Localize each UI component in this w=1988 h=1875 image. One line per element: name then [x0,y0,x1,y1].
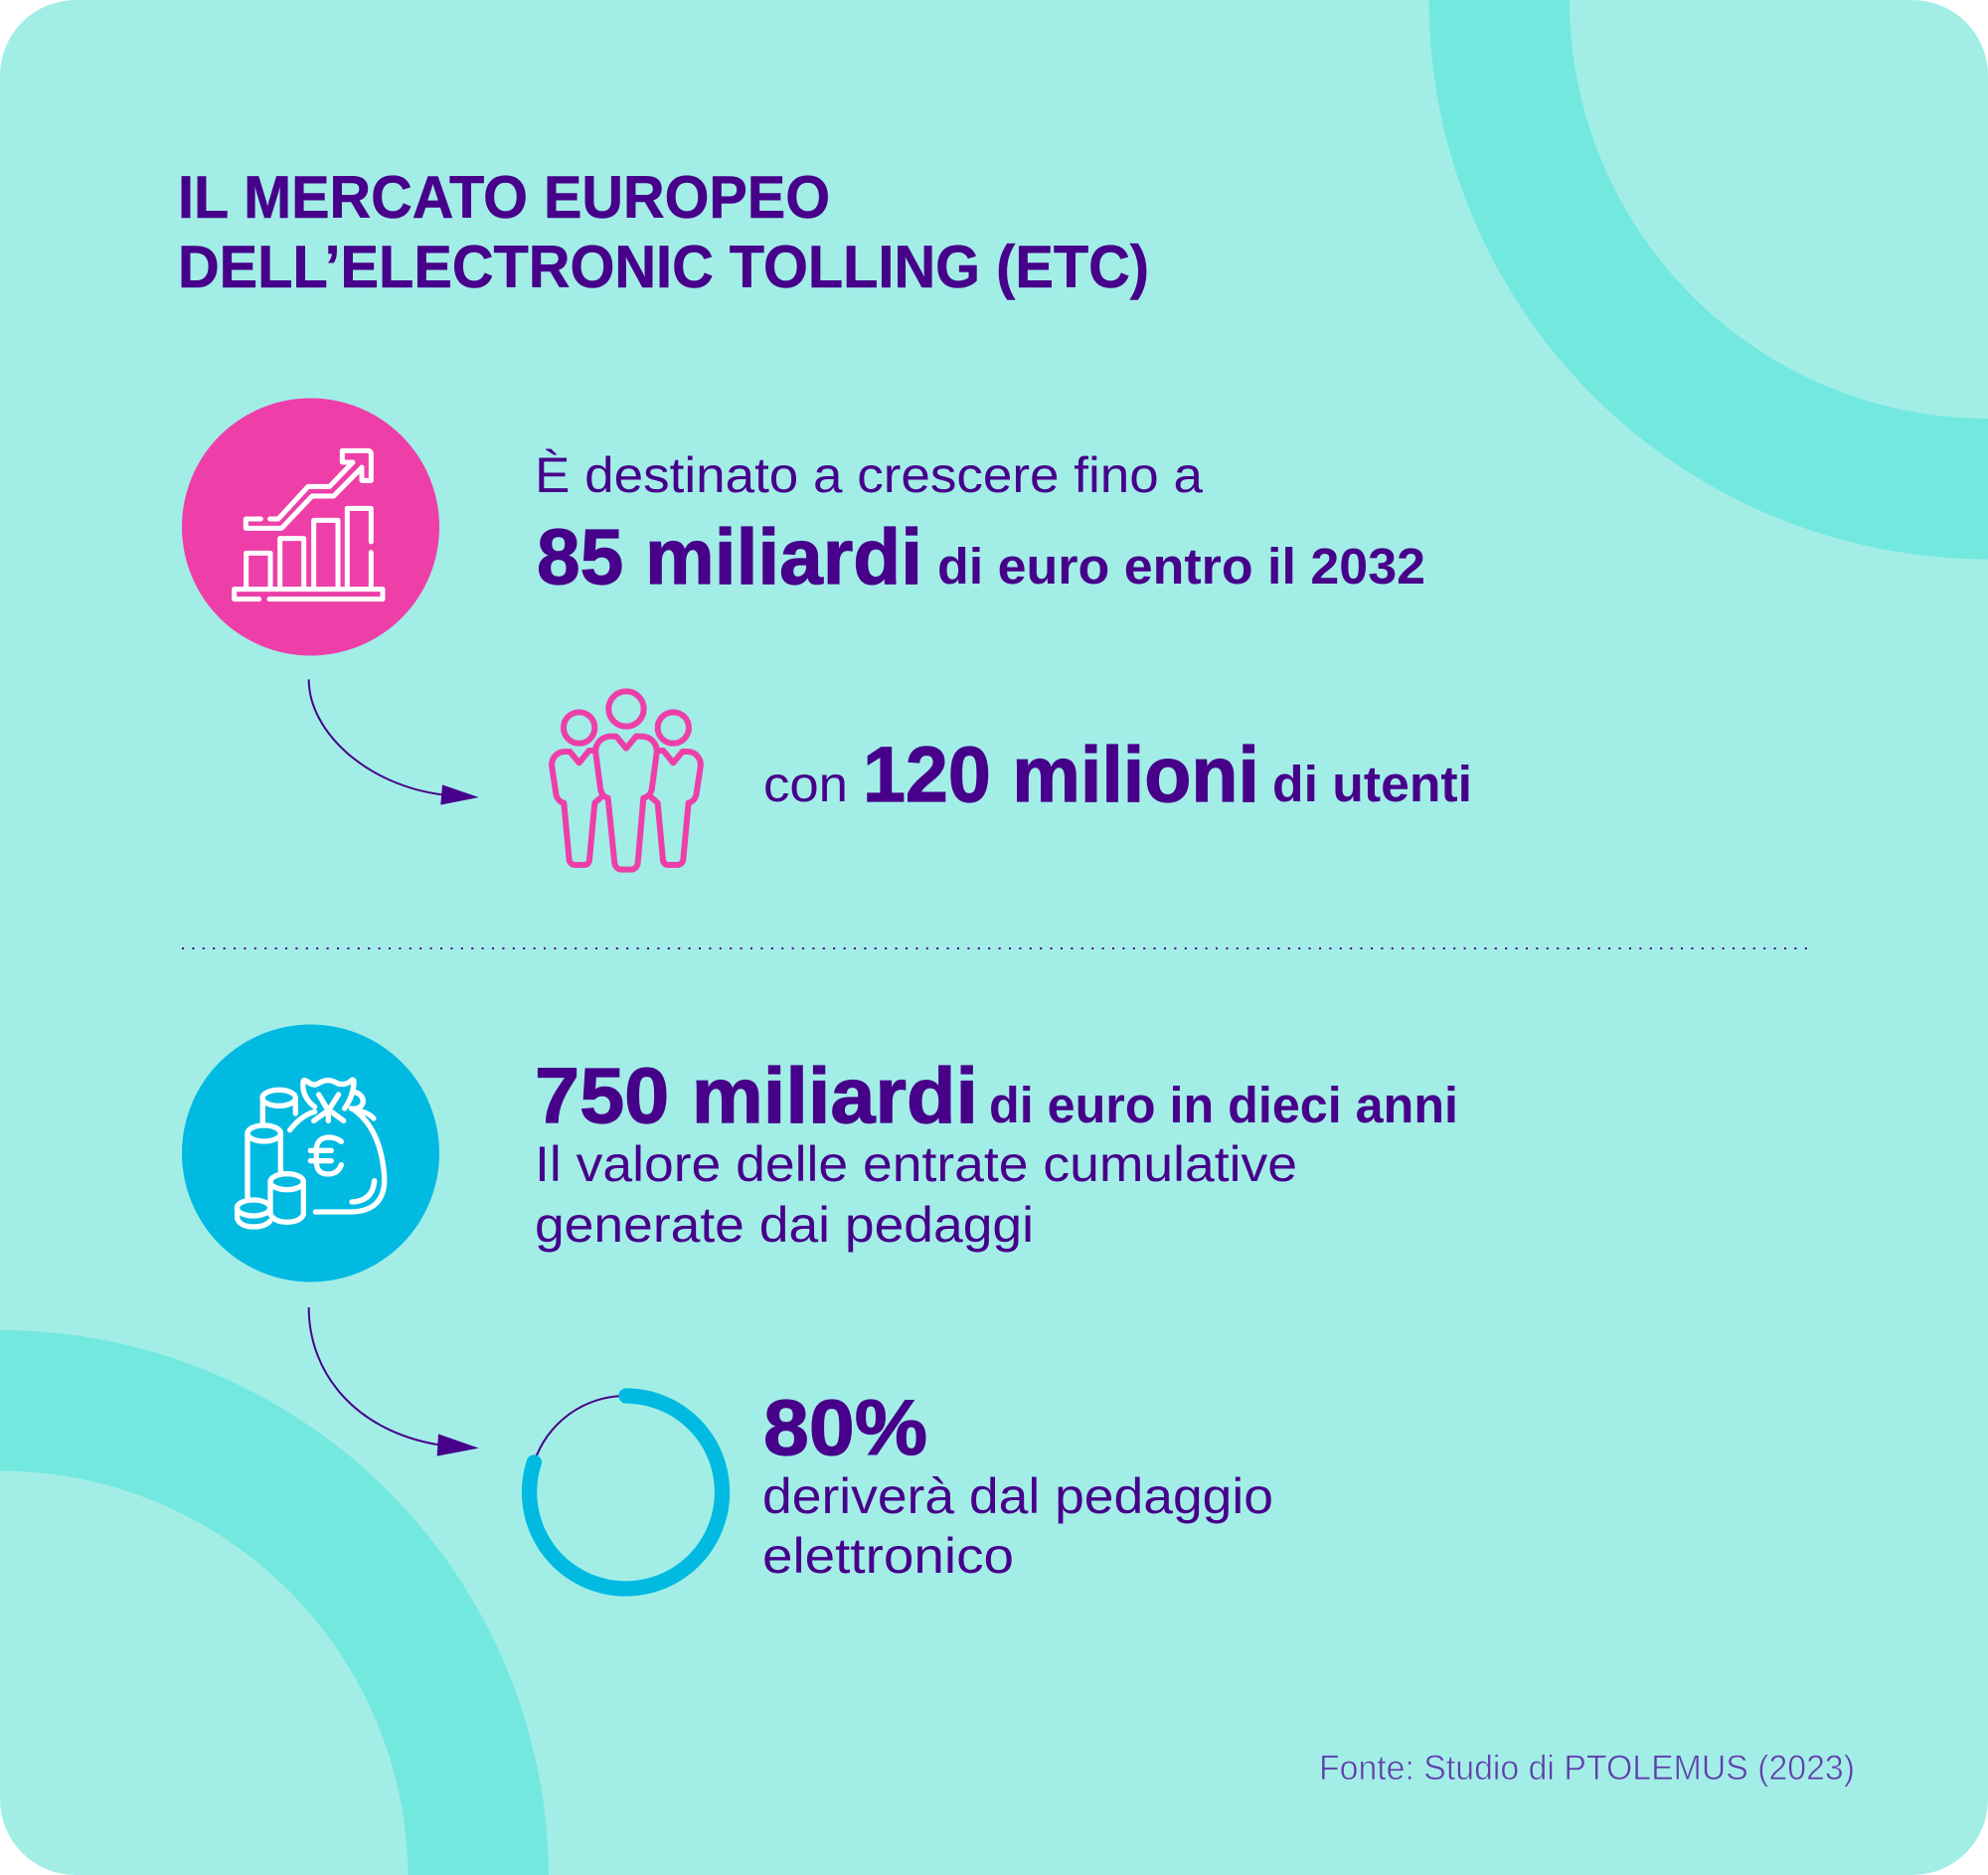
text: 750 billion: 750 miliardi [535,1051,978,1139]
text: growth to 85 billion: 85 miliardi [537,512,922,600]
title [178,164,1149,300]
text: growth to 85 billion [535,447,1425,600]
icon: blue circle with money bag and coins [182,1024,439,1282]
icon: pink circle with growth chart [182,398,439,656]
icon: three people [552,691,701,870]
source note: Fonte: Studio di PTOLEMUS (2023) [1319,1749,1855,1788]
title: DELL’ELECTRONIC TOLLING (ETC) [178,234,1149,300]
text: 120 million users: 120 milioni [863,730,1259,818]
text: 80 percent: 80% [763,1383,927,1471]
text: 120 million users: con [763,757,848,812]
decorative ring: top right [1429,0,1988,559]
text: 750 billion [535,1051,1458,1253]
text: 80 percent [762,1383,1273,1584]
text: 750 billion: generate dai pedaggi [535,1197,1034,1253]
decorative ring: bottom left [0,1330,549,1875]
text: 120 million users [763,730,1472,818]
text: growth to 85 billion: di euro entro il 2032 [937,538,1425,595]
text: 750 billion: di euro in dieci anni [989,1077,1458,1133]
arrow: to users [309,679,479,805]
text: growth to 85 billion: È destinato a crescere fino a [535,447,1203,503]
text: 80 percent: deriverà dal pedaggio [762,1468,1273,1524]
text: 120 million users: di utenti [1272,756,1472,812]
title: IL MERCATO EUROPEO [178,164,830,231]
text: 80 percent: elettronico [762,1528,1014,1584]
arrow: to donut [309,1307,479,1456]
chart: 80% donut [530,1396,723,1589]
text: 750 billion: Il valore delle entrate cumulative [535,1136,1297,1192]
